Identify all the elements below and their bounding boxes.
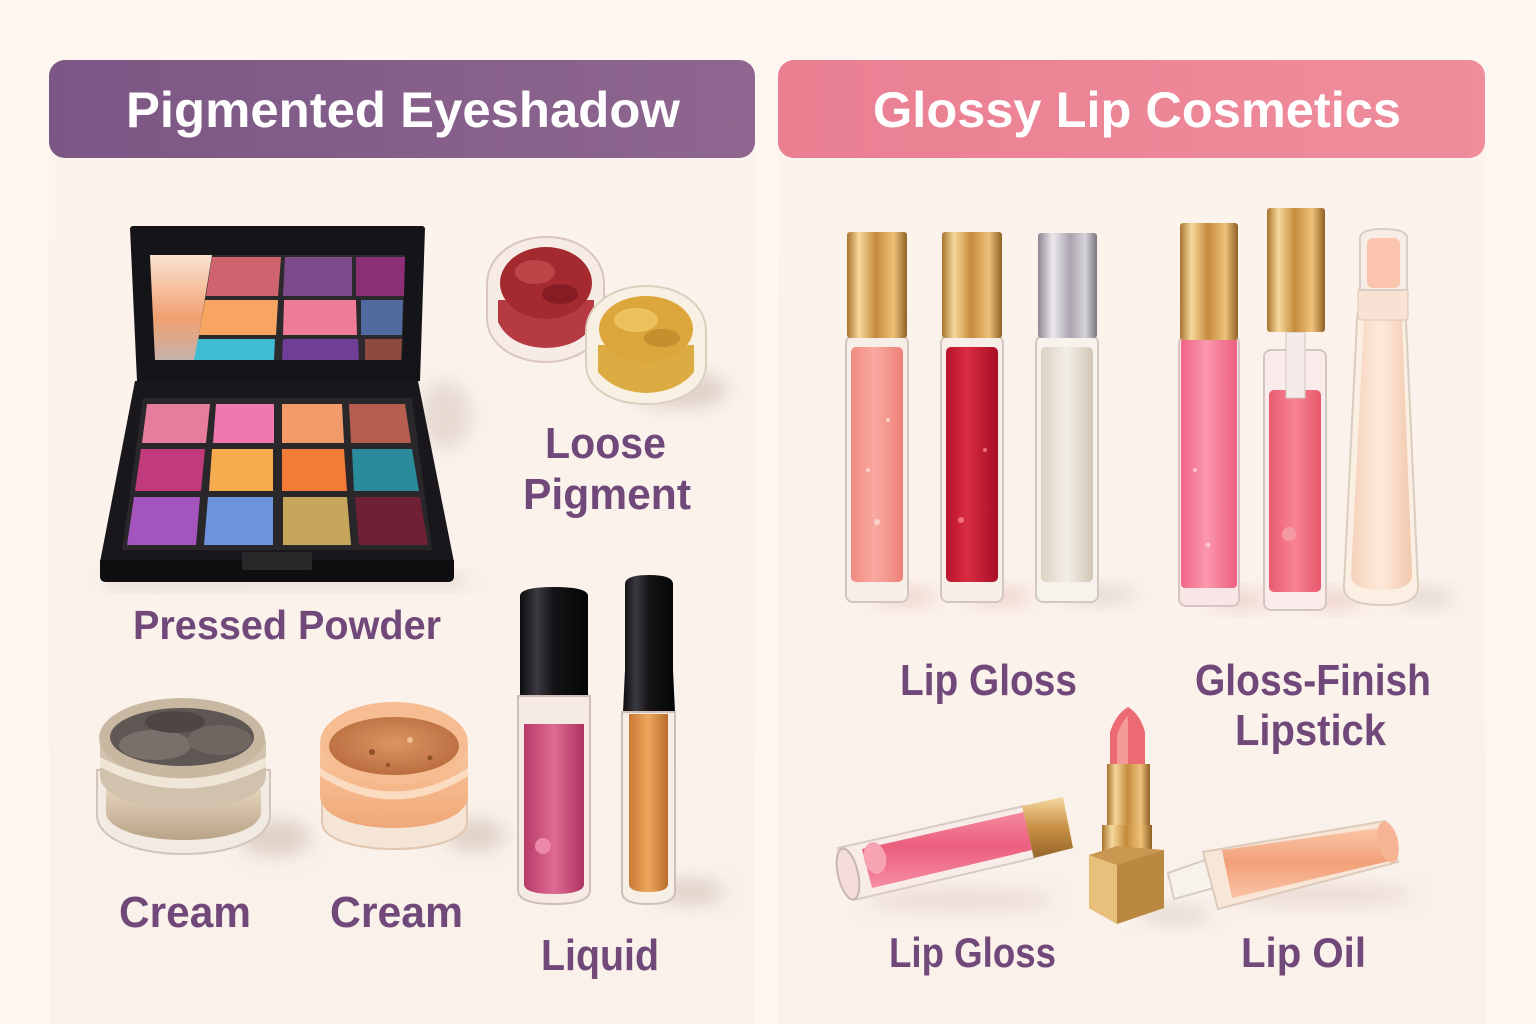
label: lip gloss tilted: Lip Gloss [889, 929, 1056, 976]
icon: liquid eyeshadow tubes [518, 575, 724, 904]
label: pressed powder: Pressed Powder [133, 602, 441, 648]
panel: pigmented eyeshadow [49, 60, 755, 1024]
label: loose pigment: Loose [545, 419, 666, 468]
icon: loose pigment jars [487, 237, 728, 408]
icon: lip oil [1168, 819, 1415, 909]
label: liquid: Liquid [541, 931, 659, 980]
heading: glossy lip cosmetics [778, 60, 1485, 158]
label: gloss-finish lipstick: Gloss-Finish [1195, 656, 1431, 705]
icon: tilted lip gloss [832, 797, 1073, 910]
label: lip oil: Lip Oil [1241, 929, 1366, 976]
icon: lipstick [1089, 707, 1211, 924]
label: cream peach: Cream [330, 888, 463, 937]
icon: cream pot peach [320, 702, 505, 851]
heading: pigmented eyeshadow [49, 60, 755, 158]
label: lip gloss: Lip Gloss [900, 656, 1077, 705]
icon: nude gloss bottle [1344, 229, 1455, 607]
panel: glossy lip cosmetics [778, 60, 1485, 1024]
icon: cream pot taupe [97, 698, 311, 856]
icon: lip gloss tube red [941, 232, 1032, 605]
icon: lip gloss tube coral [846, 232, 937, 605]
icon: pink gloss tube [1179, 223, 1270, 608]
heading: pigmented eyeshadow: Pigmented Eyeshadow [126, 82, 680, 138]
icon: open gloss with applicator [1264, 208, 1365, 610]
icon: pressed powder palette [100, 226, 478, 587]
icon: lip gloss tube pearl [1036, 233, 1138, 603]
label: loose pigment: Pigment [523, 470, 691, 519]
label: cream taupe: Cream [119, 888, 251, 937]
heading: glossy lip cosmetics: Glossy Lip Cosmetics [873, 82, 1401, 138]
label: gloss-finish lipstick: Lipstick [1235, 706, 1386, 755]
